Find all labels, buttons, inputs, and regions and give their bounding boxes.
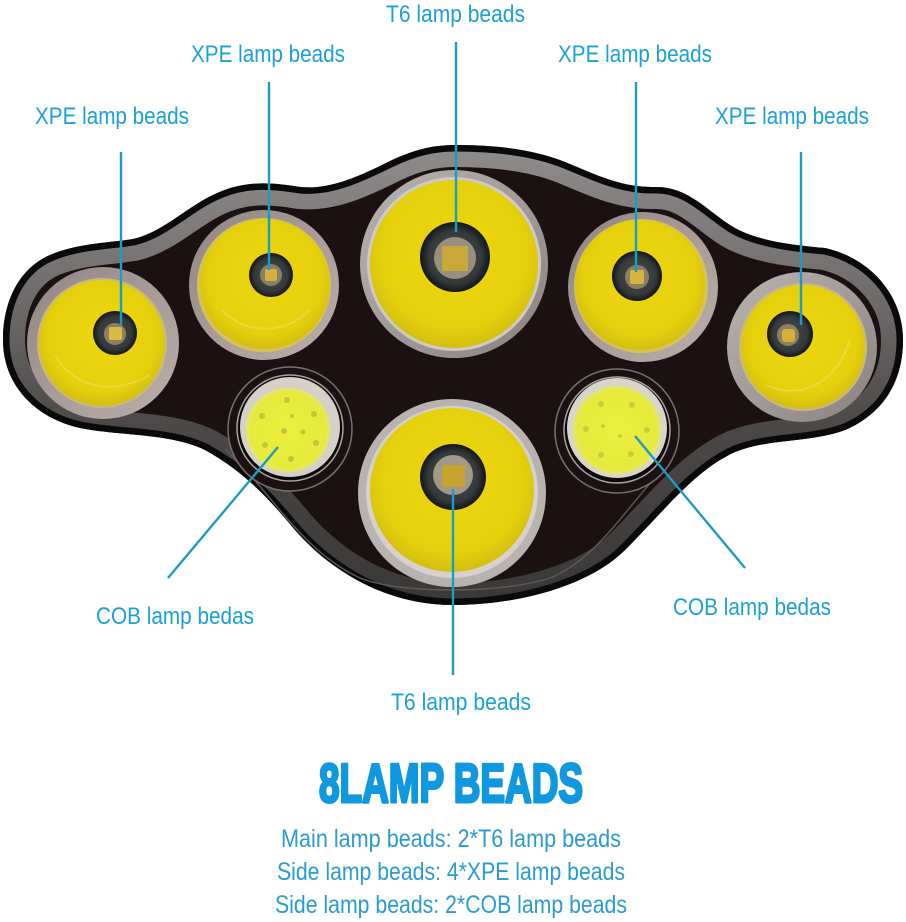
title: 8LAMP BEADS — [319, 752, 583, 814]
description text: Side lamp beads: 4*XPE lamp beads — [277, 858, 625, 886]
lens: far right XPE — [727, 272, 877, 422]
description text: Main lamp beads: 2*T6 lamp beads — [281, 825, 621, 853]
callout lines — [121, 42, 801, 675]
label: COB left: COB lamp bedas — [96, 603, 254, 630]
label: XPE second right: XPE lamp beads — [558, 41, 712, 68]
label: bottom T6: T6 lamp beads — [391, 689, 531, 716]
lens: bottom center T6 — [358, 399, 546, 587]
label: XPE far right: XPE lamp beads — [715, 103, 869, 130]
label: top T6: T6 lamp beads — [386, 1, 525, 28]
label: XPE second left: XPE lamp beads — [191, 41, 345, 68]
COB lamp: left — [228, 367, 352, 491]
COB lamp: right — [555, 369, 679, 493]
headlamp body — [0, 140, 906, 610]
lens: top center T6 — [360, 170, 548, 358]
description text: Side lamp beads: 2*COB lamp beads — [275, 891, 627, 919]
label: XPE far left: XPE lamp beads — [35, 103, 189, 130]
label: COB right: COB lamp bedas — [673, 594, 831, 621]
lens: far left XPE — [27, 267, 179, 419]
lens: second left XPE — [189, 210, 339, 360]
description text — [275, 825, 627, 919]
lens: second right XPE — [568, 212, 718, 362]
